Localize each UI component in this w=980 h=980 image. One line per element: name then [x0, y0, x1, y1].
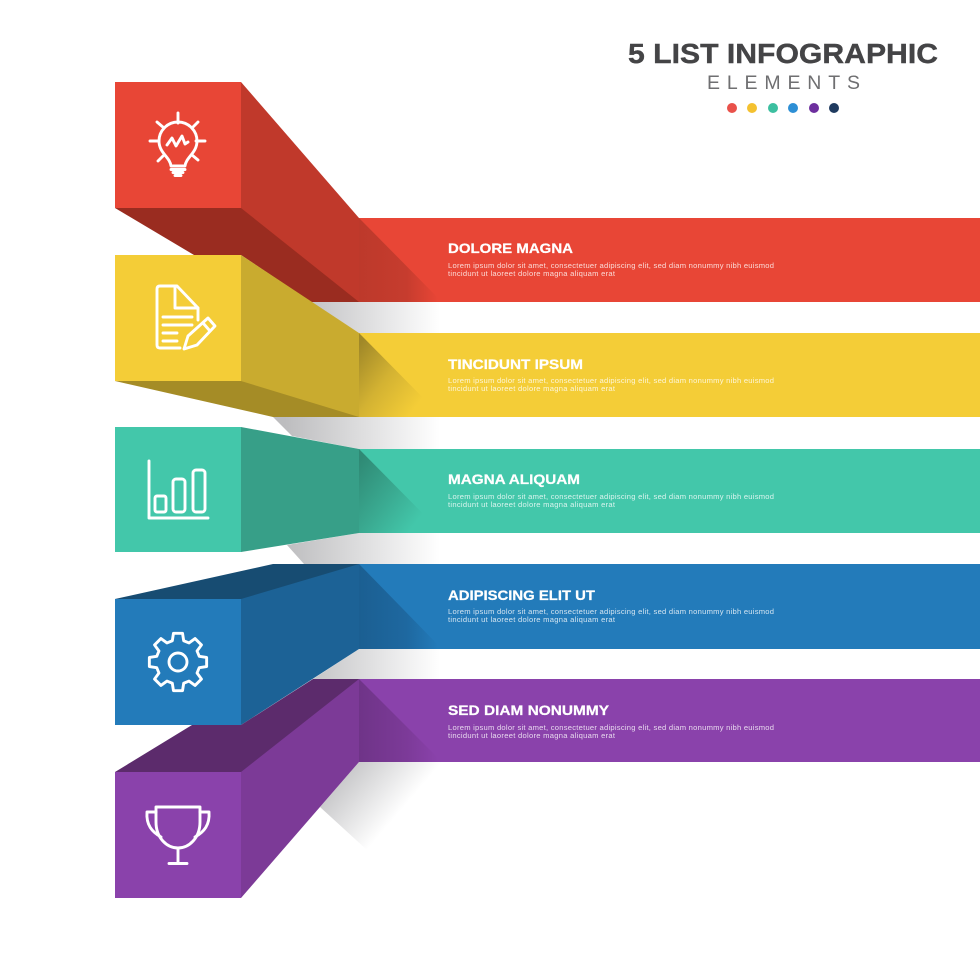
fold	[359, 564, 442, 649]
body text	[448, 723, 774, 740]
icon: light bulb	[150, 113, 205, 176]
body text	[448, 607, 774, 624]
heading: TINCIDUNT IPSUM	[448, 356, 583, 372]
title block	[628, 38, 938, 113]
body text	[448, 261, 774, 278]
fold	[359, 679, 442, 762]
side face	[241, 427, 359, 552]
item 1: red	[115, 82, 980, 302]
icon: gear	[149, 633, 207, 691]
body text: tincidunt ut laoreet dolore magna aliquam erat	[448, 384, 616, 393]
band	[359, 218, 980, 302]
body text	[448, 492, 774, 509]
body text: tincidunt ut laoreet dolore magna aliquam erat	[448, 731, 616, 740]
body text: Lorem ipsum dolor sit amet, consectetuer adipiscing elit, sed diam nonummy nibh euismod	[448, 376, 774, 385]
title: 5 LIST INFOGRAPHIC	[628, 38, 938, 69]
item 3: teal	[115, 427, 980, 552]
heading: MAGNA ALIQUAM	[448, 471, 580, 487]
front face	[115, 772, 241, 898]
body text: Lorem ipsum dolor sit amet, consectetuer adipiscing elit, sed diam nonummy nibh euismod	[448, 492, 774, 501]
side face	[241, 255, 359, 417]
drop shadows	[273, 302, 442, 850]
band	[359, 679, 980, 762]
bottom face	[115, 195, 359, 302]
band	[359, 564, 980, 649]
heading: ADIPISCING ELIT UT	[448, 587, 595, 603]
front face	[115, 599, 241, 725]
body text: Lorem ipsum dolor sit amet, consectetuer adipiscing elit, sed diam nonummy nibh euismod	[448, 261, 774, 270]
front face	[115, 255, 241, 381]
front face	[115, 427, 241, 552]
body text	[448, 376, 774, 393]
bottom face	[115, 370, 359, 417]
icon: trophy	[147, 807, 209, 864]
band	[359, 333, 980, 417]
body text: Lorem ipsum dolor sit amet, consectetuer adipiscing elit, sed diam nonummy nibh euismod	[448, 723, 774, 732]
side face	[241, 82, 359, 302]
body text: tincidunt ut laoreet dolore magna aliquam erat	[448, 269, 616, 278]
heading: DOLORE MAGNA	[448, 240, 573, 256]
subtitle: ELEMENTS	[707, 72, 860, 94]
side face	[241, 679, 359, 898]
side face	[241, 564, 359, 725]
heading: SED DIAM NONUMMY	[448, 702, 610, 718]
fold	[359, 218, 442, 302]
front face	[115, 82, 241, 208]
icon: bar chart	[149, 461, 208, 518]
fold	[359, 449, 442, 533]
item 2: yellow	[115, 255, 980, 417]
item 5: purple	[115, 679, 980, 898]
top face	[115, 679, 359, 785]
body text: Lorem ipsum dolor sit amet, consectetuer adipiscing elit, sed diam nonummy nibh euismod	[448, 607, 774, 616]
colour dots	[727, 103, 839, 113]
body text: tincidunt ut laoreet dolore magna aliquam erat	[448, 615, 616, 624]
icon: document and pencil	[157, 286, 215, 349]
fold	[359, 333, 442, 417]
top face	[115, 564, 359, 610]
body text: tincidunt ut laoreet dolore magna aliquam erat	[448, 500, 616, 509]
item 4: blue	[115, 564, 980, 725]
band	[359, 449, 980, 533]
